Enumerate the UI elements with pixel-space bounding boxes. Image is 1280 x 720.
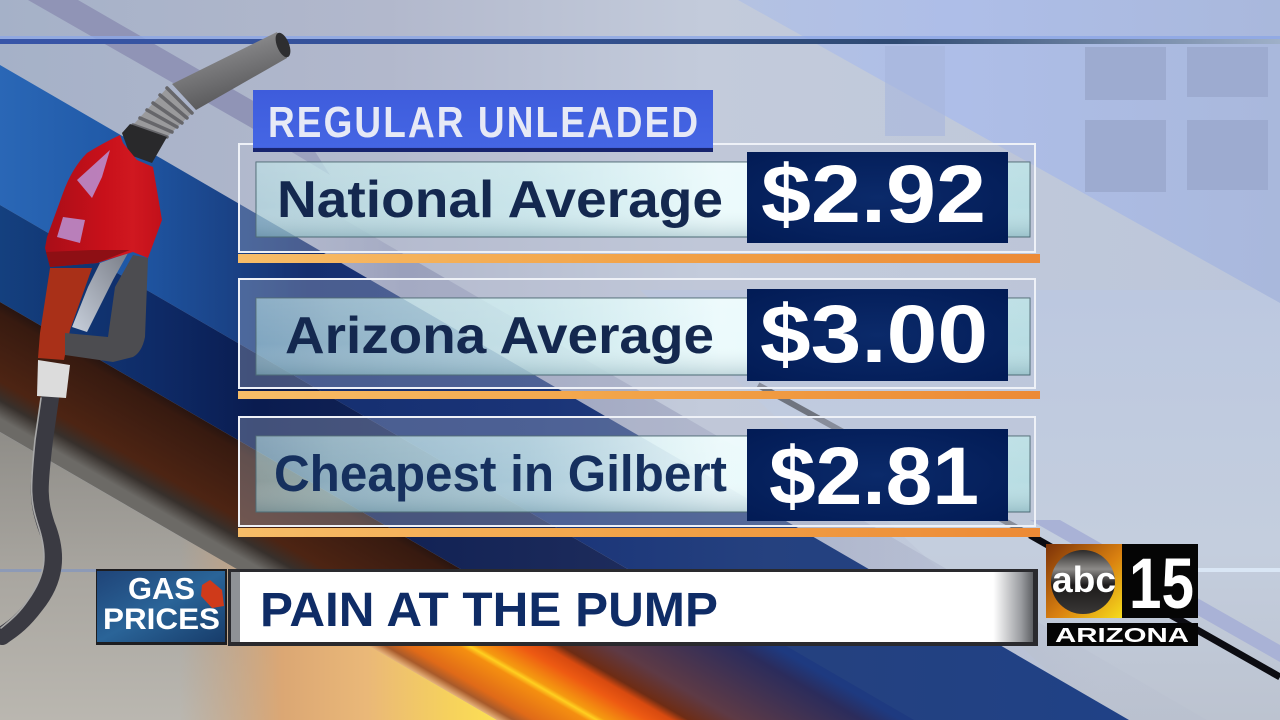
gas prices thumbnail: [96, 569, 227, 645]
trigger lever: [72, 253, 128, 332]
label: Cheapest in Gilbert: [274, 445, 727, 502]
arizona bar: [1047, 623, 1198, 647]
price box: $3.00: [760, 289, 988, 380]
price box: $2.81: [769, 431, 979, 522]
body lower shadow: [46, 250, 130, 267]
gas prices thumbnail: PRICES: [103, 603, 220, 636]
arizona bar: ARIZONA: [1055, 625, 1189, 647]
ticker: pain at the pump: [228, 569, 1038, 646]
grey grip: [65, 255, 148, 362]
gas prices thumbnail: GAS: [128, 571, 195, 606]
abc globe: abc: [1052, 559, 1116, 600]
icon: red fuel nozzle and hose: [1, 31, 293, 636]
red body: [45, 135, 162, 267]
hose: [1, 398, 53, 636]
panel: arizona average: [238, 279, 1040, 399]
panel: cheapest in gilbert: [238, 417, 1040, 537]
spout: [172, 31, 293, 110]
nozzle collar: [122, 124, 167, 163]
logo: abc 15 arizona: [1046, 544, 1198, 647]
heading: regular unleaded: REGULAR UNLEADED: [268, 97, 698, 147]
red handle: [38, 268, 92, 360]
icon: small red nozzle: [201, 580, 224, 608]
label: National Average: [277, 171, 723, 229]
top rule line: [0, 36, 1280, 44]
hose collar: [37, 360, 70, 398]
ticker: pain at the pump: PAIN AT THE PUMP: [260, 584, 718, 637]
abc globe: [1051, 550, 1116, 614]
label: Arizona Average: [285, 307, 714, 365]
panel: national average: [238, 144, 1040, 263]
body highlights: [57, 150, 110, 243]
logo: abc 15 arizona: 15: [1129, 545, 1194, 624]
bellows: [133, 88, 192, 137]
price box: $2.92: [761, 149, 986, 240]
